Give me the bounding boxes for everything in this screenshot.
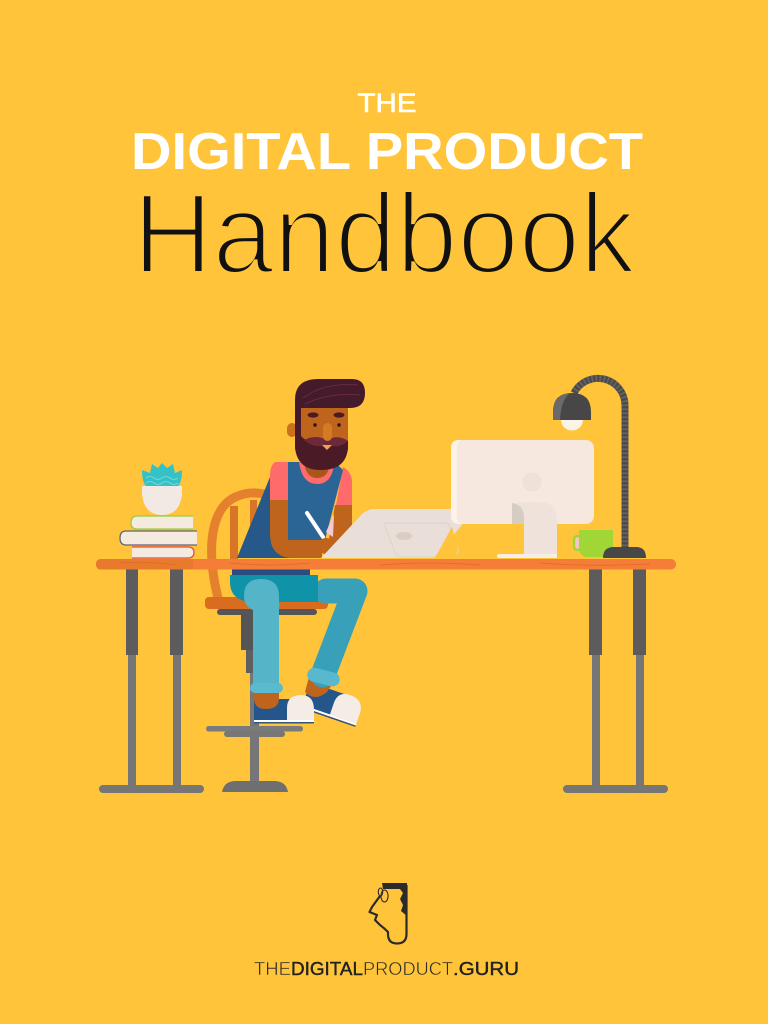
logo <box>254 883 519 979</box>
title: THE: THE <box>358 88 416 118</box>
logo wordmark: PRODUCT <box>363 958 453 979</box>
mug <box>574 530 613 557</box>
logo icon: head profile <box>370 883 407 944</box>
title: Handbook: Handbook <box>133 171 636 298</box>
desk legs <box>99 569 668 793</box>
laptop <box>321 509 462 558</box>
desk top <box>96 559 676 570</box>
ear <box>287 423 297 437</box>
head <box>295 379 365 470</box>
hips <box>230 575 318 602</box>
illustration: person at desk <box>96 378 676 793</box>
logo wordmark <box>254 958 519 979</box>
logo wordmark: DIGITAL <box>291 958 363 979</box>
plant pot <box>142 463 182 515</box>
lamp <box>553 378 646 558</box>
pencil <box>307 513 323 537</box>
monitor <box>451 440 594 558</box>
right leg and shoe <box>301 591 365 727</box>
title: DIGITAL PRODUCT: DIGITAL PRODUCT <box>131 123 643 181</box>
books <box>120 516 197 558</box>
person <box>230 379 365 727</box>
title block <box>131 88 643 298</box>
logo wordmark: THE <box>254 958 291 979</box>
logo wordmark: .GURU <box>453 958 519 979</box>
left leg and shoe <box>244 579 314 724</box>
chair <box>205 493 328 792</box>
torso <box>237 462 352 558</box>
hand <box>318 538 334 554</box>
